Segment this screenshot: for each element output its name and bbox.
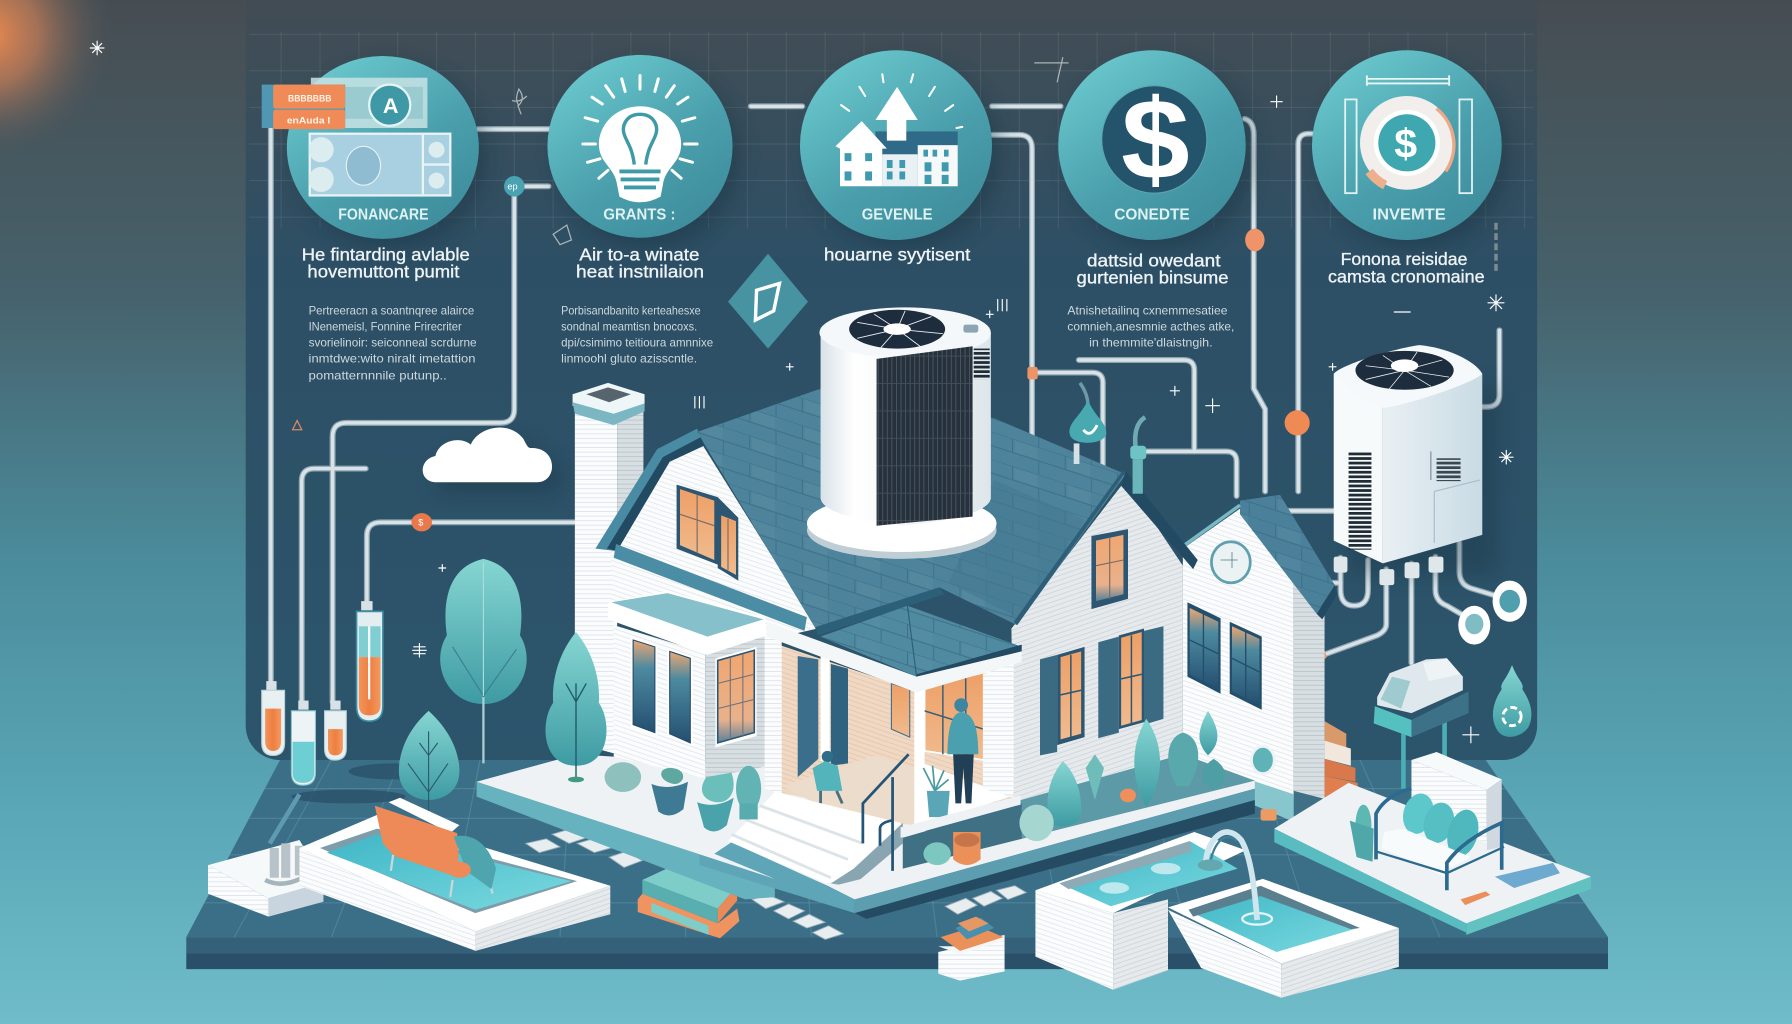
icon: ticket with A badge	[311, 78, 427, 128]
column 4 body text: in themmite'dlaistngih.	[1089, 335, 1213, 349]
bay window 3	[715, 647, 757, 747]
bay window 2	[667, 648, 693, 746]
column 2 body text: dpi/csimimo teitioura amnnixe	[561, 335, 713, 349]
unit fan	[1355, 351, 1454, 390]
eave band	[614, 544, 807, 631]
small tool	[1461, 891, 1490, 905]
pool left with sofa	[299, 798, 610, 951]
column 2 body text: Porbisandbanito kerteahesxe	[561, 303, 701, 317]
column 2 heading: Air to-a winate	[579, 245, 700, 265]
icon: light rays	[583, 75, 697, 178]
bottle valve on pipes	[1069, 383, 1106, 464]
column 4 heading: dattsid owedant	[1087, 250, 1221, 270]
pipe valve: orange node right	[1285, 410, 1310, 435]
lower pool	[1168, 879, 1399, 998]
icon: coin ring: $	[1394, 121, 1417, 167]
chimney and left wall	[573, 383, 645, 754]
column 1 body text: Pertreeracn a soantnqree alairce	[309, 303, 475, 317]
narrow leaf	[1199, 711, 1217, 755]
patio book	[1495, 863, 1560, 888]
handrail	[863, 754, 909, 871]
column 4 body text	[1067, 303, 1234, 349]
teal stones	[923, 842, 951, 865]
circle 4: dollar	[1058, 50, 1254, 249]
test tube vial 2	[291, 701, 315, 785]
column 2 body text: sondnal meamtisn bnocoxs.	[561, 319, 697, 333]
unit side vent	[1349, 451, 1371, 550]
column 1 heading	[302, 245, 470, 282]
succulent	[1202, 759, 1225, 790]
leaf plant	[1047, 761, 1081, 826]
grille	[877, 346, 973, 526]
pale shrub	[1019, 805, 1054, 841]
icon: orange tags	[262, 85, 345, 129]
big heat pump unit on roof	[807, 307, 997, 559]
porch roof	[767, 606, 1022, 693]
column 1 body text: INenemeisl, Fonnine Frirecriter	[309, 319, 462, 333]
pipe valve: orange node left	[411, 513, 432, 531]
fountain pools right	[1035, 809, 1399, 998]
circle 1 label: FONANCARE	[338, 206, 429, 223]
column 2 heading	[576, 245, 704, 282]
wall disc ornament	[1251, 746, 1274, 774]
left pot 2	[697, 773, 734, 831]
tall leaf	[1134, 719, 1160, 807]
column 5 heading: camsta cronomaine	[1328, 266, 1485, 286]
small outlined ornaments	[293, 57, 1496, 430]
orange planter	[953, 832, 981, 865]
column 2 body text: linmoohl gluto azisscntle.	[561, 351, 697, 365]
pump block left	[208, 794, 325, 917]
small leaf tree right	[546, 632, 606, 782]
stacked books bottom	[938, 917, 1005, 981]
bush	[1168, 733, 1198, 786]
test tube vial 1	[262, 681, 285, 755]
water drop icon	[1493, 665, 1531, 737]
orange stone by fountain	[1261, 809, 1277, 821]
floor platform	[186, 760, 1608, 969]
circle 4 label: CONEDTE	[1114, 206, 1190, 223]
leaf small	[1086, 754, 1104, 800]
column 1 heading: He fintarding avlable	[302, 245, 470, 265]
porch column	[914, 688, 925, 827]
side window in porch	[891, 683, 910, 737]
stepping stones left	[526, 829, 1026, 939]
icon: side bars	[1345, 99, 1472, 193]
big leaf tree	[440, 559, 527, 763]
icon: ticket with A badge: A	[383, 93, 399, 118]
fan	[849, 310, 945, 349]
right gable section	[1183, 495, 1337, 826]
patio sofa	[1376, 789, 1504, 890]
round clock vent	[1211, 542, 1250, 583]
gable trim	[595, 429, 703, 551]
main roof	[697, 389, 1198, 635]
icon: up arrow	[875, 87, 918, 141]
small roof	[1240, 495, 1335, 614]
icon: banknote card	[309, 134, 450, 195]
left pot 3	[736, 766, 761, 819]
unit front vent	[1437, 458, 1461, 481]
pipe network	[271, 106, 1499, 703]
front steps	[728, 792, 903, 887]
pipe joint orange	[1027, 367, 1038, 379]
pipe end cap	[1312, 648, 1327, 662]
column 1 body text: pomatternnnile putunp..	[309, 368, 447, 382]
column 4 body text: Atnishetailinq cxnemmesatiee	[1067, 303, 1228, 317]
pipe valve: orange node middle	[1245, 229, 1265, 251]
person adult	[947, 698, 978, 803]
disc gauge 1	[1458, 606, 1490, 645]
shutters and window 2	[1040, 647, 1085, 755]
circle 1: finance tickets	[262, 56, 487, 248]
column 1 heading: hovemuttont pumit	[307, 262, 460, 282]
side louvre	[974, 349, 990, 379]
column 3 heading: houarne syytisent	[824, 245, 970, 265]
water arc fountain	[1198, 832, 1257, 920]
side step stack	[1325, 721, 1358, 798]
circle 3 label: GEVENLE	[862, 206, 933, 223]
sofa	[375, 798, 496, 897]
copier machine	[1374, 658, 1469, 789]
house foundation platform	[477, 754, 926, 913]
pipe discs under unit	[1334, 557, 1527, 645]
stack box behind sofa	[1411, 752, 1502, 850]
planter cactus	[1350, 805, 1374, 862]
floating diamond icon	[728, 254, 808, 349]
icon: houses	[835, 121, 958, 186]
roof pipe teal node	[1269, 502, 1286, 519]
main left gable wall	[595, 429, 817, 640]
column 1 body text: svorielinoir: seiconneal scrdurne	[309, 335, 477, 349]
pipe valve: orange node left: $	[418, 518, 423, 528]
window upper right	[1091, 529, 1128, 609]
test tube vial 4	[357, 601, 383, 721]
circle 5: investment ring	[1312, 50, 1510, 249]
right wing wall	[1011, 480, 1183, 802]
icon: bulb	[599, 106, 681, 202]
icon: rays	[841, 74, 962, 128]
white porch wall right	[983, 663, 1014, 798]
shutters and window 3	[1098, 626, 1163, 738]
column 4 body text: comnieh,anesmnie acthes atke,	[1067, 319, 1234, 333]
planter shelf and foundation	[830, 754, 1255, 919]
books left	[638, 865, 739, 938]
column 1 body text: inmtdwe:wito niralt imetattion	[309, 351, 475, 365]
circle 3: home value	[800, 50, 1000, 249]
dark backdrop panel	[246, 0, 1537, 760]
plants by house	[605, 711, 1225, 865]
right patio platform	[1274, 752, 1591, 935]
person child	[813, 751, 842, 803]
small leaf tree left	[399, 711, 459, 814]
circle 2: grants lightbulb	[547, 55, 741, 248]
left pot 1	[651, 768, 688, 815]
icon: coin ring	[1360, 96, 1454, 190]
icon: orange tags: enAuda I	[287, 115, 330, 125]
bay window 1	[631, 637, 657, 736]
outdoor unit right	[1334, 345, 1498, 575]
pipe valve: teal node: ep	[507, 182, 518, 192]
icon: dark disc	[1102, 86, 1207, 193]
small valve at roof pipe	[1130, 417, 1146, 494]
icon: dollar sign: $	[1121, 76, 1190, 203]
column 5 heading	[1328, 249, 1485, 286]
circle 5 label: INVEMTE	[1373, 206, 1446, 223]
column 1 body text	[309, 303, 477, 382]
porch potted plant	[923, 766, 950, 817]
column 5 heading: Fonona reisidae	[1341, 249, 1468, 269]
column 2 heading: heat instnilaion	[576, 262, 704, 282]
pipe valve: teal node	[504, 176, 525, 197]
icon: top bracket	[1367, 75, 1449, 86]
column 4 heading: gurtenien binsume	[1077, 267, 1229, 287]
icon: orange tags: BBBBBBB	[288, 94, 332, 104]
gable window	[677, 485, 738, 581]
door	[798, 656, 848, 777]
lower bay	[608, 591, 767, 778]
side windows	[1187, 602, 1221, 694]
porch	[765, 606, 1022, 827]
test tube vial 3	[325, 701, 346, 760]
disc gauge 2	[1493, 581, 1527, 622]
porch large window	[925, 671, 991, 761]
small shrubs	[605, 762, 641, 792]
cloud	[423, 428, 563, 494]
orange stone	[1120, 789, 1136, 802]
orange glow top left	[0, 0, 246, 229]
small star decorations	[90, 41, 1513, 743]
column 4 heading	[1077, 250, 1229, 287]
circle 2 label: GRANTS :	[603, 206, 675, 223]
column 2 body text	[561, 303, 713, 365]
